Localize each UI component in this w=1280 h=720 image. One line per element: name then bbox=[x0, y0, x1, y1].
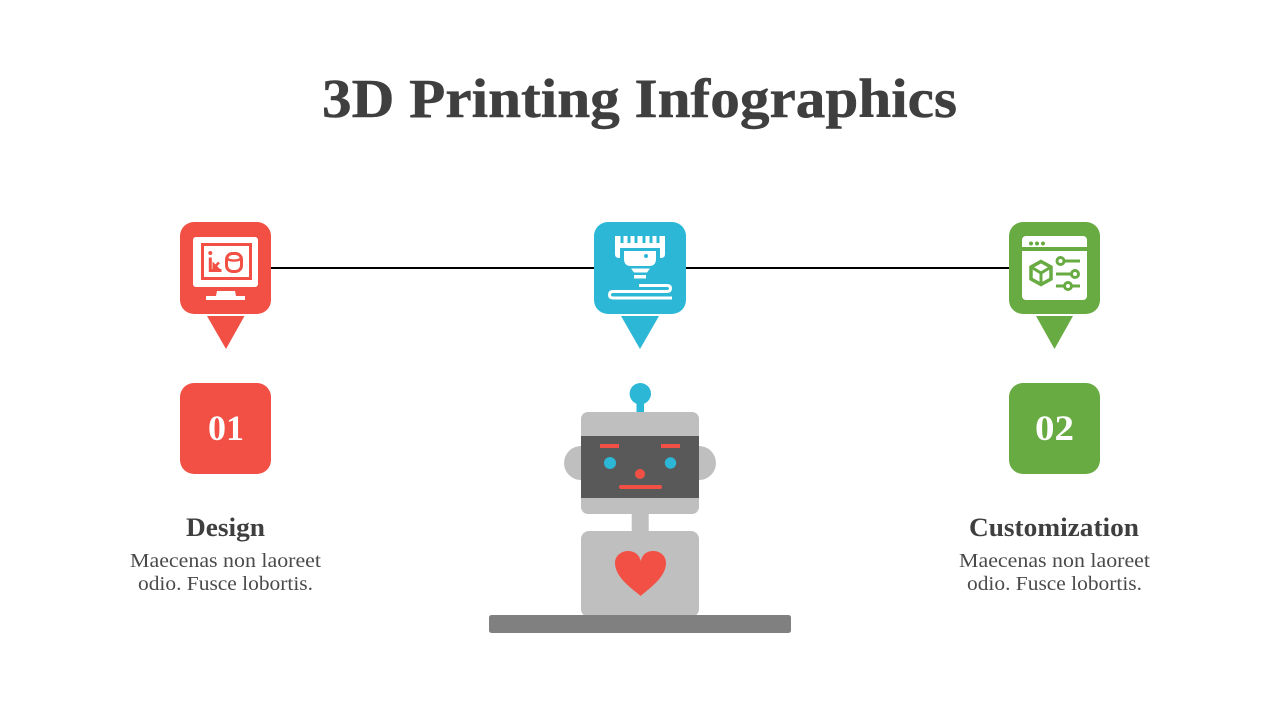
number badge 01: 01 bbox=[208, 408, 244, 448]
robot ears bbox=[564, 446, 716, 480]
icon: 3D printer nozzle bbox=[610, 236, 672, 298]
robot head bbox=[581, 412, 699, 514]
text block: design: Design bbox=[186, 513, 266, 542]
text block: design: Maecenas non laoreet bbox=[130, 550, 321, 572]
text block: customization: odio. Fusce lobortis. bbox=[967, 573, 1142, 595]
title: 3D Printing Infographics bbox=[322, 68, 957, 129]
text block: customization: Customization bbox=[969, 513, 1140, 542]
robot face bbox=[581, 436, 699, 498]
number badge 02: 02 bbox=[1035, 408, 1074, 448]
text block: customization bbox=[959, 513, 1150, 595]
connector line bbox=[271, 267, 1009, 269]
robot neck bbox=[632, 512, 649, 533]
marker: printing bbox=[594, 222, 686, 349]
icon: heart bbox=[615, 551, 666, 596]
marker: customization bbox=[1009, 222, 1100, 349]
number badge 02 bbox=[1009, 383, 1100, 474]
number badge 01 bbox=[180, 383, 271, 474]
robot antenna bbox=[630, 383, 651, 413]
robot base platform bbox=[489, 615, 791, 633]
icon: settings window bbox=[1022, 236, 1087, 300]
marker: design bbox=[180, 222, 271, 349]
robot illustration bbox=[489, 383, 791, 633]
text block: design bbox=[130, 513, 321, 595]
icon: CAD monitor bbox=[193, 237, 258, 300]
robot body bbox=[581, 531, 699, 617]
text block: design: odio. Fusce lobortis. bbox=[138, 573, 313, 595]
text block: customization: Maecenas non laoreet bbox=[959, 550, 1150, 572]
